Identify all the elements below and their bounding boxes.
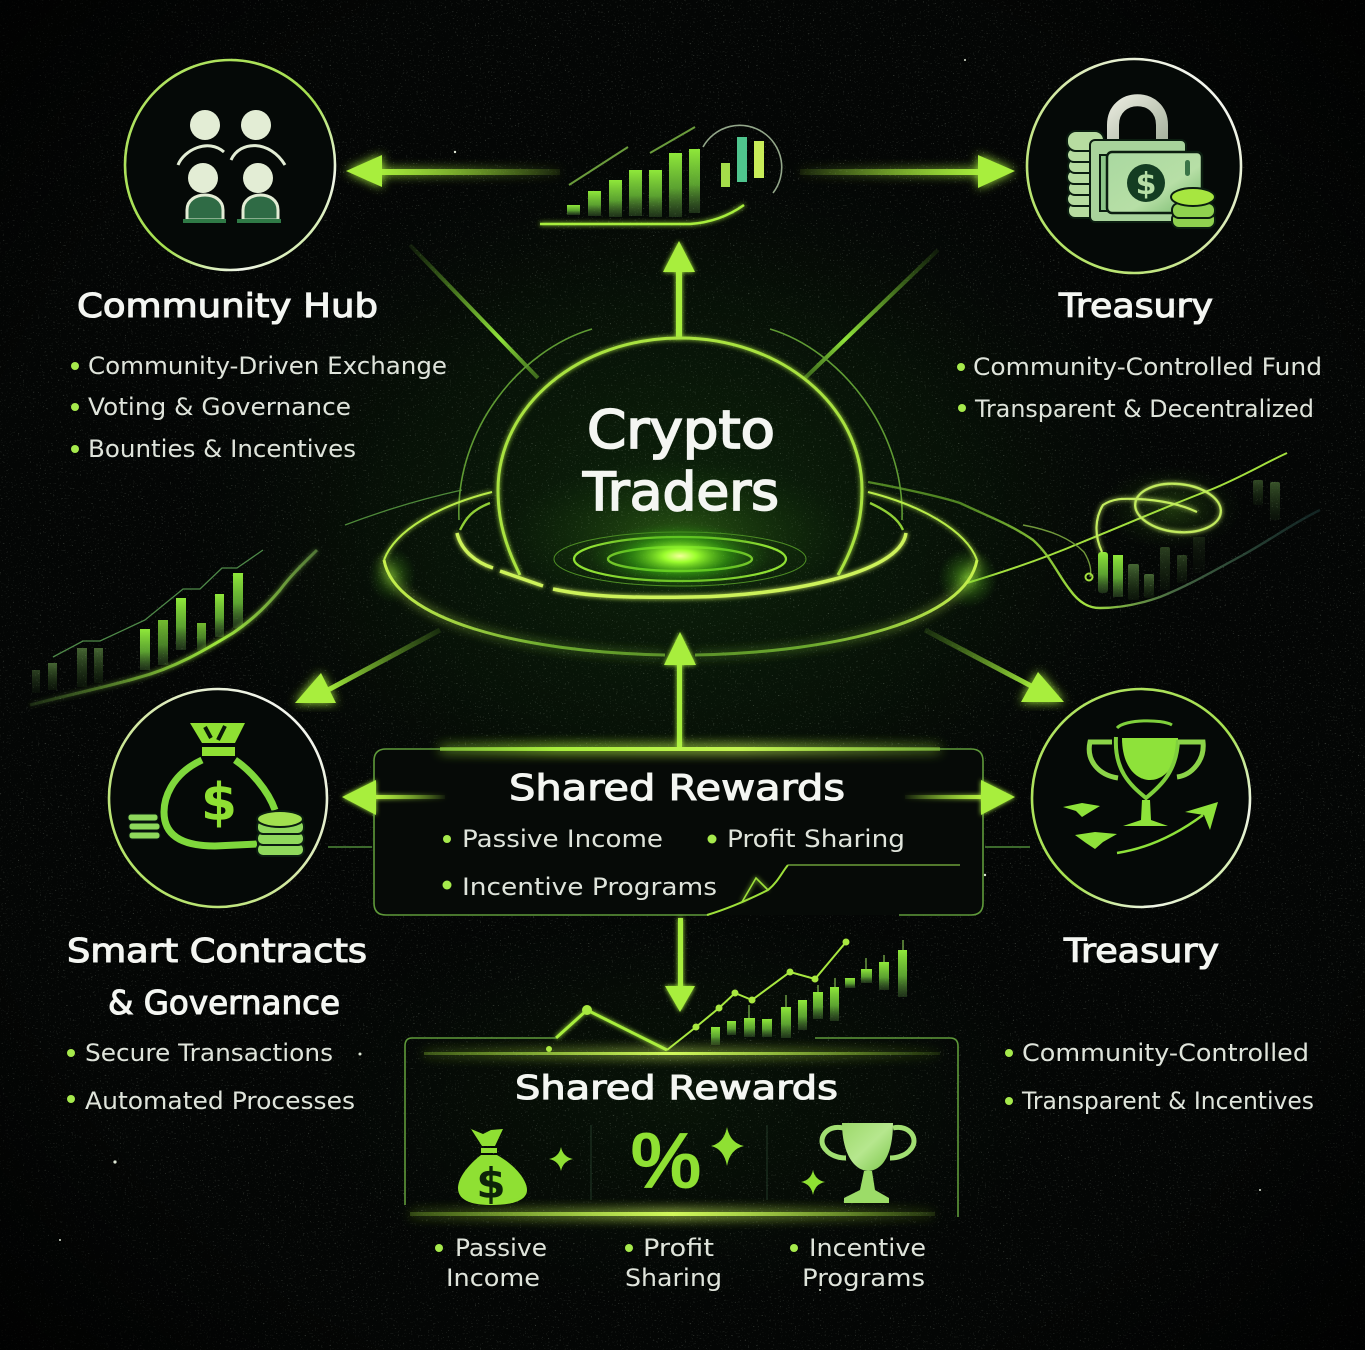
icon: sparkle small — [801, 1170, 825, 1195]
arrow: center up — [663, 241, 695, 338]
bullet labels: Passive — [455, 1234, 547, 1262]
panel: Smart Contracts & Governance — [67, 689, 1030, 1115]
icon: trophy with growth arrow — [1032, 689, 1250, 907]
bullet labels: Profit — [643, 1234, 714, 1262]
bullet list: Secure Transactions — [85, 1039, 333, 1067]
icon: percent: % — [630, 1116, 702, 1205]
icon: money bag: $ — [476, 1159, 506, 1208]
bullet labels: Income — [446, 1264, 540, 1292]
heading: & Governance — [108, 983, 340, 1022]
arrow: rewards up to hub — [664, 632, 696, 748]
heading: Treasury — [1063, 931, 1219, 970]
panel: Shared Rewards box — [374, 747, 983, 915]
heading: Community Hub — [77, 286, 378, 325]
left side chart decoration — [30, 490, 462, 705]
arrow: to Community Hub — [346, 155, 560, 187]
panel: Shared Rewards icons — [405, 1038, 958, 1292]
panel: Community Hub — [71, 60, 447, 463]
heading: Shared Rewards — [515, 1068, 838, 1107]
bullet labels — [435, 1234, 926, 1292]
bullet labels: Sharing — [625, 1264, 722, 1292]
rising accent line — [707, 865, 960, 915]
bullet labels: Programs — [802, 1264, 925, 1292]
icon: money bag — [458, 1129, 527, 1208]
bullet list — [1005, 1039, 1314, 1115]
heading: Shared Rewards — [509, 768, 845, 809]
icon: money bag and coins: $ — [201, 773, 237, 833]
bullet labels: Incentive — [809, 1234, 926, 1262]
right side chart decoration — [868, 453, 1320, 608]
bullet list — [67, 1039, 355, 1115]
bullet list: Community-Controlled — [1022, 1039, 1309, 1067]
bullet list: Automated Processes — [85, 1087, 355, 1115]
bullet list — [71, 352, 447, 463]
icon: vault lock and coins — [1027, 59, 1241, 273]
icon: vault lock and coins: $ — [1136, 167, 1156, 202]
icon: community people — [125, 60, 335, 270]
icon: sparkle large — [711, 1127, 744, 1166]
arrow: to Treasury — [800, 155, 1015, 188]
bullet list: Transparent & Decentralized — [974, 395, 1314, 423]
arrow: hub to Treasury lower — [925, 630, 1064, 702]
central hub: Crypto Traders dome — [368, 329, 998, 655]
title: Crypto Traders: Traders — [582, 462, 779, 523]
bullet list: Profit Sharing — [727, 825, 905, 853]
panel: Treasury top — [957, 59, 1322, 423]
bullet list: Transparent & Incentives — [1021, 1087, 1314, 1115]
title: Crypto Traders: Crypto — [587, 400, 775, 461]
bullet list: Passive Income — [462, 825, 663, 853]
candlestick and line chart — [546, 938, 907, 1052]
title: Crypto Traders — [582, 400, 779, 523]
bullet list: Community-Controlled Fund — [973, 353, 1322, 381]
heading: Smart Contracts — [67, 931, 367, 970]
bullet list — [442, 825, 905, 901]
diagonal beams — [410, 245, 938, 378]
panel: Treasury lower — [1005, 689, 1314, 1115]
arrow: rewards to Smart Contracts — [342, 780, 445, 815]
bullet list: Bounties & Incentives — [88, 435, 356, 463]
top mini bar chart — [540, 125, 782, 224]
heading — [67, 931, 367, 1022]
arrow: rewards to Treasury lower — [905, 780, 1015, 815]
bullet list: Voting & Governance — [88, 393, 351, 421]
bullet list: Incentive Programs — [462, 873, 717, 901]
bullet list — [957, 353, 1322, 423]
icon: trophy — [822, 1123, 914, 1203]
arrow: hub to Smart Contracts — [295, 630, 440, 703]
icon: money bag and coins — [109, 689, 1030, 907]
arrow: rewards down — [665, 918, 695, 1012]
heading: Treasury — [1058, 286, 1213, 325]
bullet list: Community-Driven Exchange — [88, 352, 447, 380]
icon: sparkle — [549, 1147, 573, 1171]
